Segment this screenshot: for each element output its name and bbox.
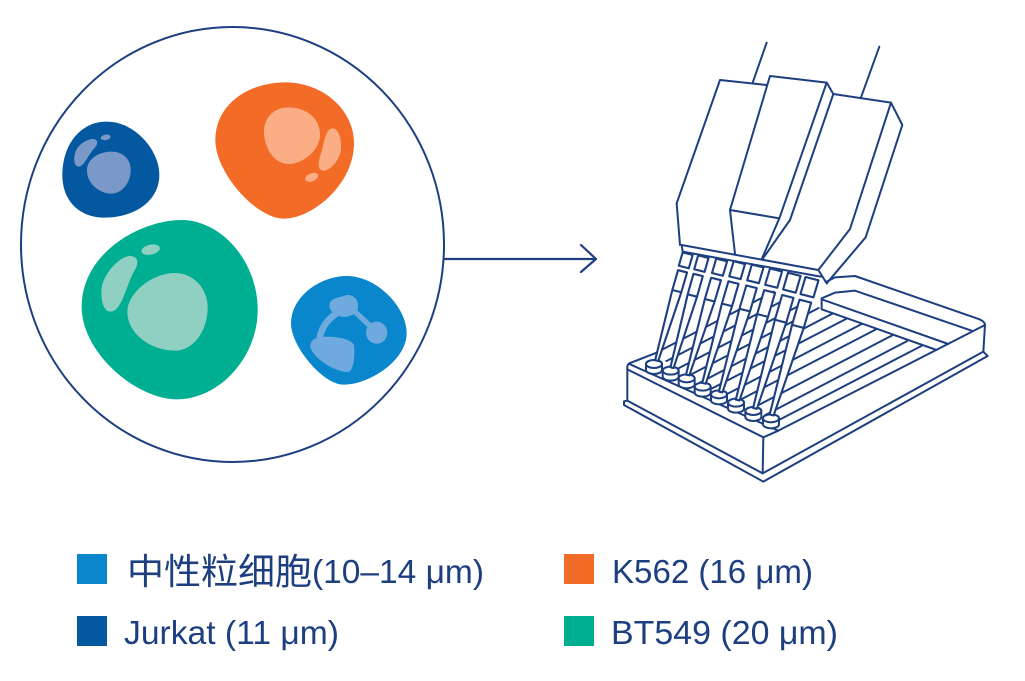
wells (646, 360, 779, 428)
legend item: K562: K562 (16 μm) (612, 553, 813, 590)
arrow (444, 245, 596, 272)
legend item: Jurkat: Jurkat (11 μm) (124, 614, 339, 651)
cell: neutrophil (291, 276, 407, 385)
pipette head housing (677, 43, 902, 283)
illustration: pipetting head and plate (624, 43, 988, 482)
legend item: BT549: BT549 (20 μm) (611, 614, 838, 651)
legend item: neutrophil (77, 551, 484, 592)
cell: Jurkat (62, 122, 159, 218)
circle outline (21, 27, 444, 462)
cell: K562 (215, 82, 354, 219)
legend item: neutrophil: (10–14 μm) (312, 553, 484, 590)
cell: BT549 (82, 220, 258, 399)
head mounting bar (682, 245, 827, 283)
pipette tips (652, 252, 818, 417)
microplate tray (624, 276, 988, 482)
panel: cell circle (21, 27, 444, 462)
legend (77, 551, 838, 651)
legend item: neutrophil: 中性粒细胞 (127, 551, 312, 592)
